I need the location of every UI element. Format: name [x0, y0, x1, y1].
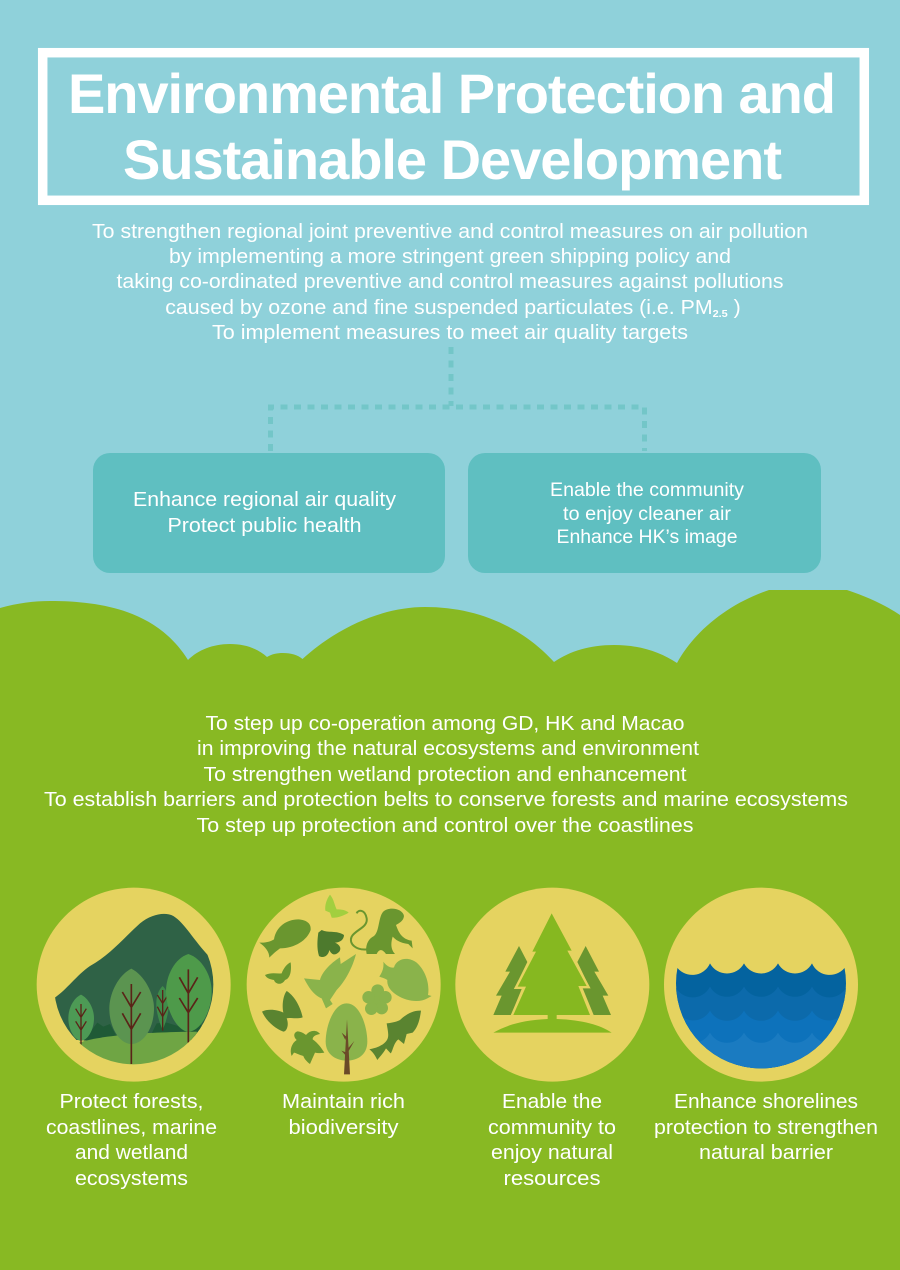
caption: biodiversity: Maintain rich: [282, 1090, 405, 1113]
ecosystem text: [44, 712, 848, 837]
caption: shorelines: [654, 1090, 878, 1164]
icon: bird: [304, 954, 356, 1008]
icon: forest landscape: [37, 888, 231, 1082]
intro text: air pollution measures: ): [728, 296, 741, 319]
icon: flower: [362, 984, 392, 1015]
icon: tree: [326, 1003, 367, 1061]
icon: butterfly large: [262, 991, 303, 1032]
intro text: air pollution measures: by implementing a more stringent green shipping policy and: [169, 245, 731, 268]
caption: biodiversity: [282, 1090, 405, 1139]
caption: protect forests: and wetland: [75, 1141, 188, 1164]
icon: biodiversity silhouettes: [247, 888, 441, 1082]
green hills background: [0, 590, 900, 1270]
panel: community benefit: Enable the community: [550, 480, 745, 501]
title: [43, 53, 864, 200]
icon: tree trunk: [341, 1019, 354, 1074]
intro text: air pollution measures: To implement measures to meet air quality targets: [212, 321, 688, 344]
icon: monkey: [366, 909, 413, 954]
ecosystem text: To establish barriers and protection belts to conserve forests and marine ecosystems: [44, 788, 848, 811]
caption: natural resources: community to: [488, 1116, 616, 1139]
caption: shorelines: natural barrier: [699, 1141, 833, 1164]
icon: pine trees: [455, 888, 649, 1082]
ecosystem text: in improving the natural ecosystems and environment: [197, 737, 699, 760]
intro text: air pollution measures: taking co-ordinated preventive and control measures against pollutions: [116, 270, 784, 293]
icon: trout: [369, 1011, 421, 1060]
panel: air quality benefit: [93, 453, 445, 573]
caption: natural resources: resources: [504, 1167, 600, 1190]
icon: turtle: [291, 1031, 324, 1064]
caption: protect forests: [46, 1090, 217, 1190]
caption: natural resources: enjoy natural: [491, 1141, 613, 1164]
icon: water waves: [664, 888, 858, 1082]
icon: fish: [259, 919, 311, 958]
caption: shorelines: Enhance shorelines: [674, 1090, 858, 1113]
ecosystem text: To step up co-operation among GD, HK and Macao: [206, 712, 684, 735]
dotted connector: [270, 347, 644, 451]
ecosystem text: To step up protection and control over the coastlines: [196, 814, 694, 837]
panel: community benefit: to enjoy cleaner air: [563, 504, 732, 525]
caption: natural resources: [488, 1090, 616, 1190]
intro text: air pollution measures: 2.5: [713, 308, 728, 320]
icon: small butterfly: [265, 962, 291, 984]
icon: leaf fish: [379, 959, 432, 1001]
caption: protect forests: Protect forests,: [60, 1090, 204, 1113]
icon: butterfly dark: [317, 930, 344, 957]
intro text: air pollution measures: [92, 220, 808, 344]
caption: shorelines: protection to strengthen: [654, 1116, 878, 1139]
icon: insect top: [325, 895, 349, 918]
caption: natural resources: Enable the: [502, 1090, 602, 1113]
title: Environmental Protection and: [68, 62, 836, 125]
caption: biodiversity: biodiversity: [288, 1116, 399, 1139]
panel: air quality benefit: Protect public health: [168, 514, 362, 537]
intro text: air pollution measures: caused by ozone and fine suspended particulates (i.e. PM: [165, 296, 713, 319]
icon: monkey tail: [351, 911, 367, 950]
caption: protect forests: coastlines, marine: [46, 1116, 217, 1139]
ecosystem text: To strengthen wetland protection and enhancement: [204, 763, 687, 786]
panel: community benefit: Enhance HK’s image: [556, 527, 738, 548]
intro text: air pollution measures: To strengthen regional joint preventive and control measures on air pollution: [92, 220, 808, 243]
title: Sustainable Development: [123, 128, 782, 191]
panel: community benefit: [468, 453, 821, 573]
panel: air quality benefit: Enhance regional air quality: [133, 488, 397, 511]
caption: protect forests: ecosystems: [75, 1167, 188, 1190]
